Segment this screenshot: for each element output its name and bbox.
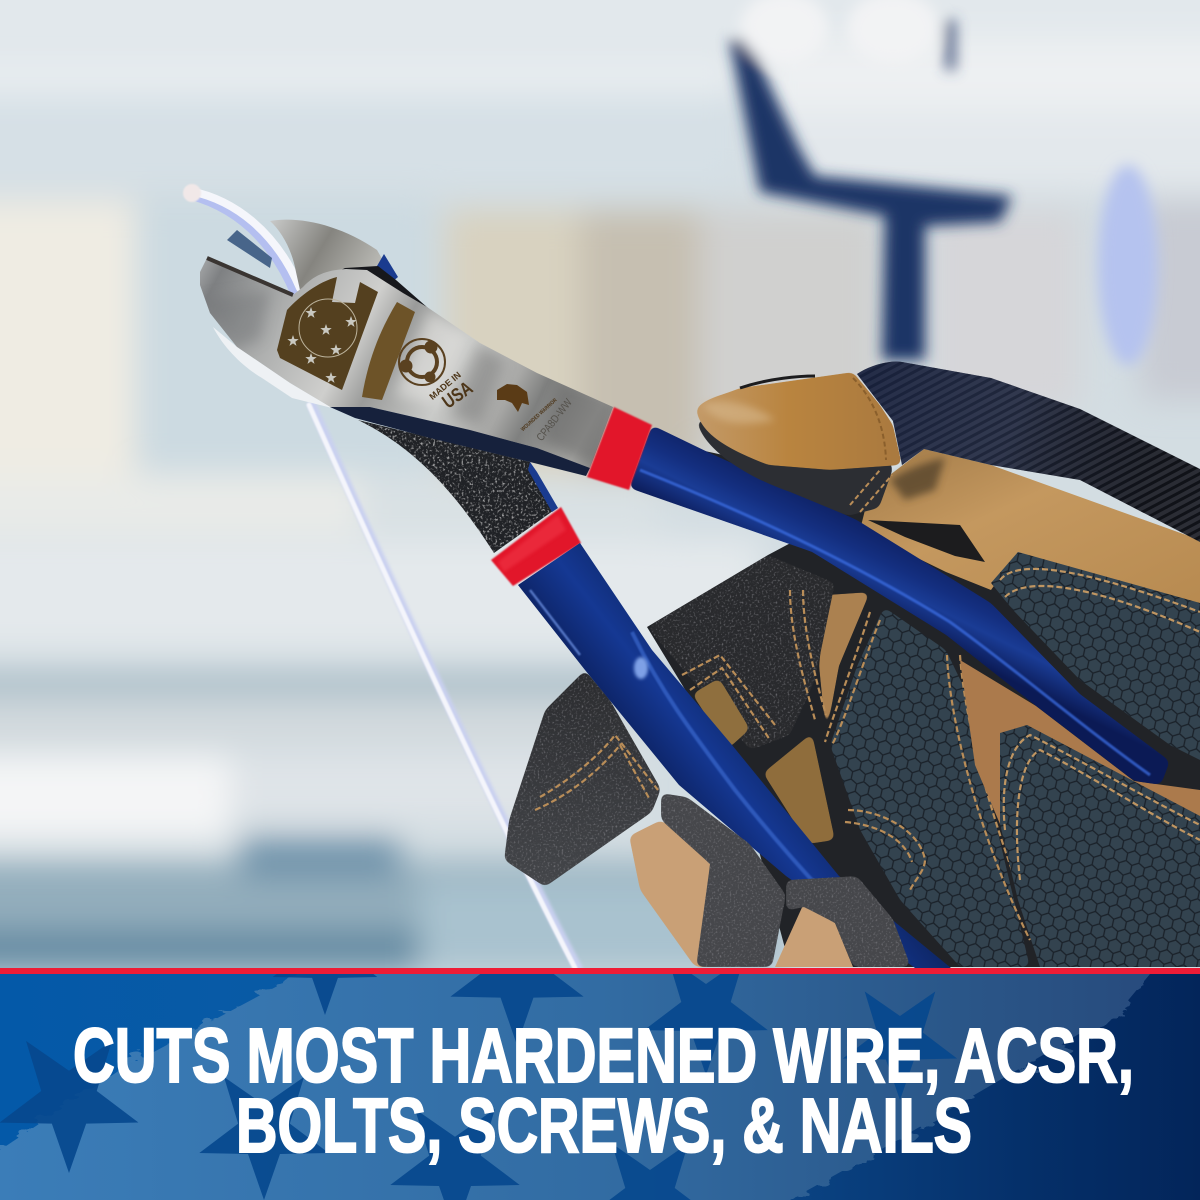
tan back of hand bbox=[860, 449, 1200, 608]
gloved hand: thumb and fingers in front bbox=[629, 372, 911, 967]
tan fingertip middle bbox=[629, 820, 720, 967]
engraved wreath logo bbox=[399, 339, 445, 385]
thumb underside black leather bbox=[697, 420, 893, 516]
upper jaw and head: brushed steel bbox=[200, 258, 613, 468]
headline bbox=[73, 1013, 1134, 1169]
dark knit cuff bbox=[857, 362, 1200, 542]
lower handle: blue grip bbox=[518, 543, 951, 968]
jaw slot bbox=[207, 258, 293, 295]
tan palm patches bbox=[763, 733, 835, 844]
model number: CPA8D-WW bbox=[535, 396, 575, 444]
thumb tip tan suede bbox=[696, 372, 902, 470]
banner bbox=[0, 968, 1200, 1200]
pliers handles bbox=[518, 407, 1170, 968]
upper handle: blue grip bbox=[629, 425, 1170, 785]
upper handle: red collar bbox=[587, 407, 652, 490]
rear jaw bbox=[227, 220, 428, 308]
lower arm: rough black steel bbox=[358, 420, 557, 553]
distressed brush stroke bbox=[0, 974, 1150, 1200]
ring finger grey bbox=[786, 876, 911, 967]
steel shading bbox=[200, 290, 620, 470]
made in USA mark bbox=[427, 370, 477, 413]
made in USA mark: USA bbox=[439, 378, 477, 413]
tan panel right of middle bbox=[960, 660, 1200, 824]
upper-right hex panel bbox=[991, 552, 1200, 760]
lower handle: red collar bbox=[491, 507, 581, 586]
middle hex panel bbox=[830, 607, 1030, 967]
lower-right hex panel bbox=[1000, 725, 1200, 967]
headline: BOLTS, SCREWS, & NAILS bbox=[236, 1083, 972, 1169]
cut wire bbox=[183, 184, 578, 968]
tan strip in palm bbox=[819, 592, 870, 737]
index finger bbox=[504, 670, 661, 887]
palm base bbox=[647, 450, 1200, 967]
lower jaw edge highlight bbox=[213, 327, 332, 408]
wounded warrior logo: WOUNDED WARRIOR bbox=[520, 398, 558, 433]
wounded warrior logo bbox=[497, 384, 558, 433]
middle finger grey bbox=[661, 793, 786, 967]
pliers head and lower arm bbox=[200, 220, 620, 586]
red stripe bbox=[0, 968, 1200, 974]
stars bbox=[0, 974, 957, 1200]
blue gradient panel bbox=[0, 974, 1200, 1200]
lower jaw dark edge bbox=[330, 407, 590, 476]
engraved flag 21 mark bbox=[277, 277, 415, 400]
made in USA mark: MADE IN bbox=[427, 370, 463, 402]
tan fingertip ring bbox=[775, 903, 853, 967]
black rough finger bbox=[647, 555, 835, 750]
gloved hand: palm and back bbox=[504, 362, 1200, 967]
